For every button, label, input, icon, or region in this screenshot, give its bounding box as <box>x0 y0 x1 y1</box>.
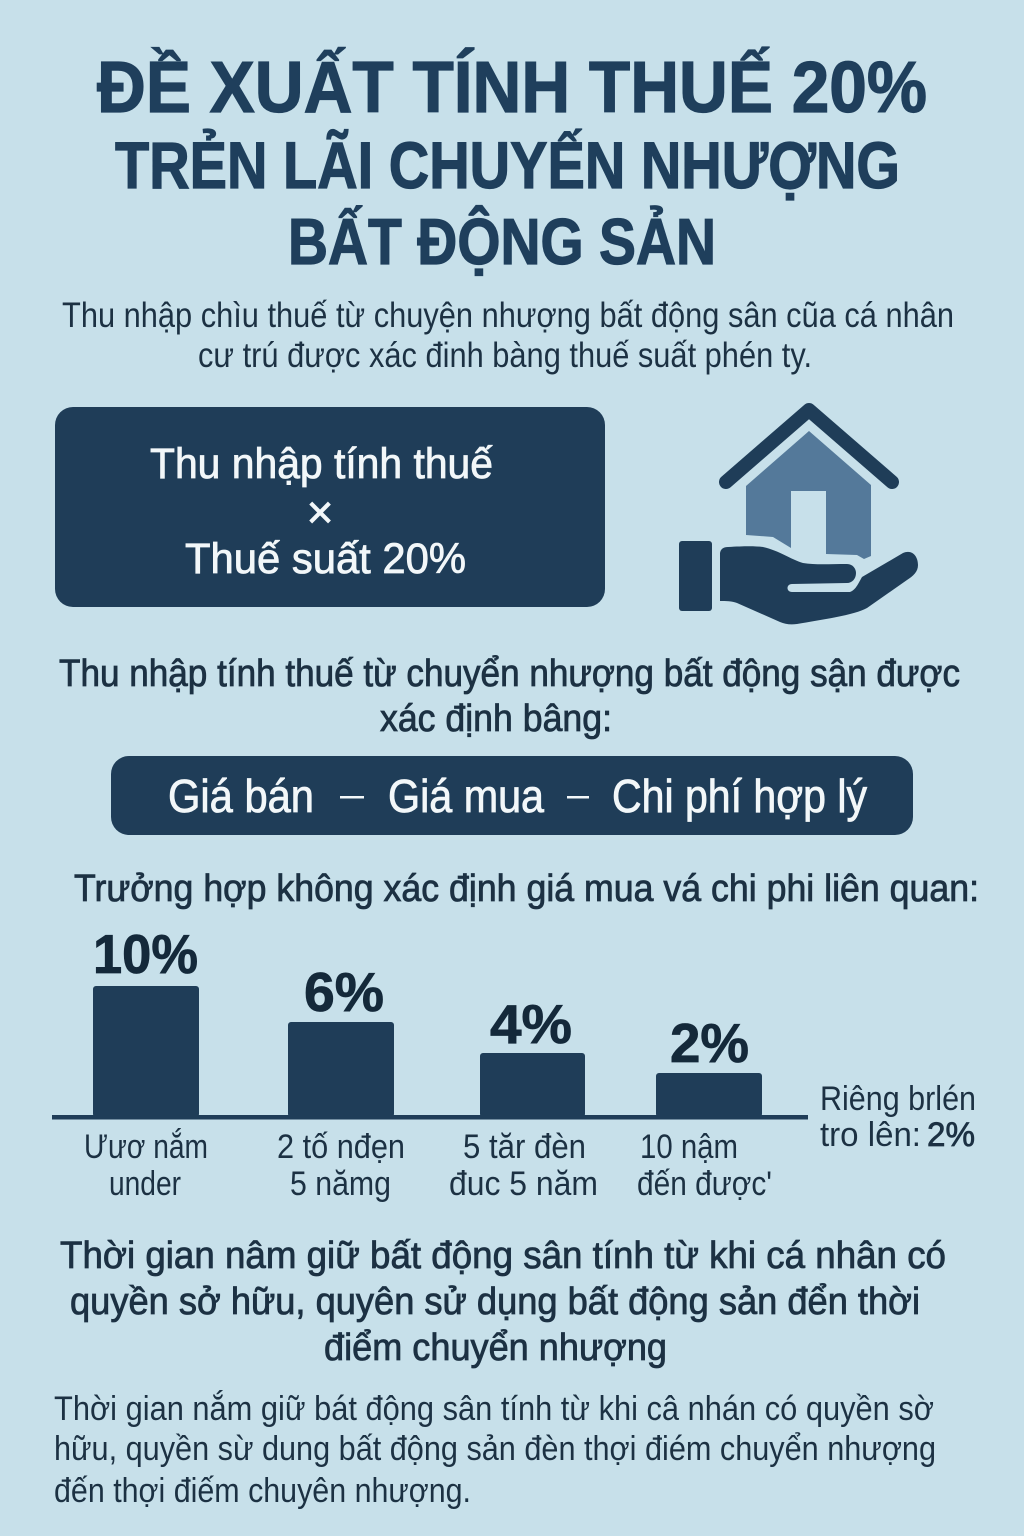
closing paragraph: Thời gian nắm giữ bát động sân tính từ khi câ nhán có quyền sờ <box>54 1390 934 1428</box>
icon: house on hand <box>679 410 918 624</box>
panel: income equation: Giá mua <box>388 770 544 822</box>
bar: 10%: 10% <box>93 923 198 985</box>
heading: holding period: quyền sở hữu, quyên sử dụng bất động sản đển thời <box>70 1281 920 1323</box>
panel: tax formula <box>55 407 605 607</box>
bar label: third: 5 tăr đèn <box>463 1128 586 1166</box>
bar: 2% <box>656 1012 762 1117</box>
heading: undetermined purchase price: Trưởng hợp không xác định giá mua vá chi phi liên quan: <box>74 868 979 910</box>
heading: taxable income: Thu nhập tính thuế từ chuyển nhượng bất động sận được <box>59 653 960 695</box>
bar: 2%: 2% <box>670 1012 749 1074</box>
side note: Riêng brlén <box>820 1080 976 1118</box>
intro text <box>62 296 954 375</box>
bar label: fourth: đến được' <box>637 1165 772 1203</box>
panel: income equation <box>111 756 913 835</box>
closing paragraph: hữu, quyền sừ dung bất động sản đèn thợi điém chuyển nhượng <box>54 1430 936 1468</box>
bar label: second: 5 nămg <box>290 1165 391 1203</box>
title: ĐỀ XUẤT TÍNH THUẾ 20% <box>97 47 927 128</box>
bar label: third: đuc 5 năm <box>449 1165 598 1203</box>
bar label: first: Ưươ nắm <box>84 1128 208 1166</box>
heading: taxable income <box>59 653 960 740</box>
bar label: first: under <box>109 1165 181 1203</box>
title <box>97 47 927 278</box>
heading: taxable income: xác định bâng: <box>380 698 612 740</box>
panel: income equation: Chi phí hợp lý <box>612 770 867 822</box>
bar chart <box>52 923 808 1203</box>
panel: tax formula: × <box>307 486 333 538</box>
bar label: fourth: 10 nậm <box>640 1128 738 1166</box>
panel: income equation: Giá bán <box>168 770 314 822</box>
closing paragraph: đến thợi điếm chuyên nhượng. <box>54 1472 471 1510</box>
bar label: fourth <box>637 1128 772 1203</box>
bar: 10% <box>93 923 199 1117</box>
title: TRẺN LÃI CHUYẾN NHƯỢNG <box>115 128 900 202</box>
heading: holding period <box>60 1235 946 1369</box>
closing paragraph <box>54 1390 936 1510</box>
side note: tro lên: <box>820 1116 921 1154</box>
side note: 2% <box>927 1116 975 1154</box>
heading: holding period: điểm chuyển nhượng <box>324 1327 667 1369</box>
panel: tax formula: Thu nhập tính thuế <box>150 440 493 488</box>
panel: tax formula: Thuế suất 20% <box>185 535 466 583</box>
bar: 4% <box>480 993 585 1117</box>
bar label: third <box>449 1128 598 1203</box>
title: BẤT ĐỘNG SẢN <box>288 205 716 278</box>
bar: 6%: 6% <box>304 961 384 1023</box>
bar label: second: 2 tố nđẹn <box>277 1128 405 1166</box>
intro text: cư trú được xác đinh bàng thuế suất phén ty. <box>198 336 812 375</box>
bar: 4%: 4% <box>490 993 572 1055</box>
bar label: second <box>277 1128 405 1203</box>
bar label: first <box>84 1128 208 1203</box>
heading: holding period: Thời gian nâm giữ bất động sân tính từ khi cá nhân có <box>60 1235 946 1277</box>
side note <box>820 1080 976 1154</box>
bar: 6% <box>288 961 394 1117</box>
